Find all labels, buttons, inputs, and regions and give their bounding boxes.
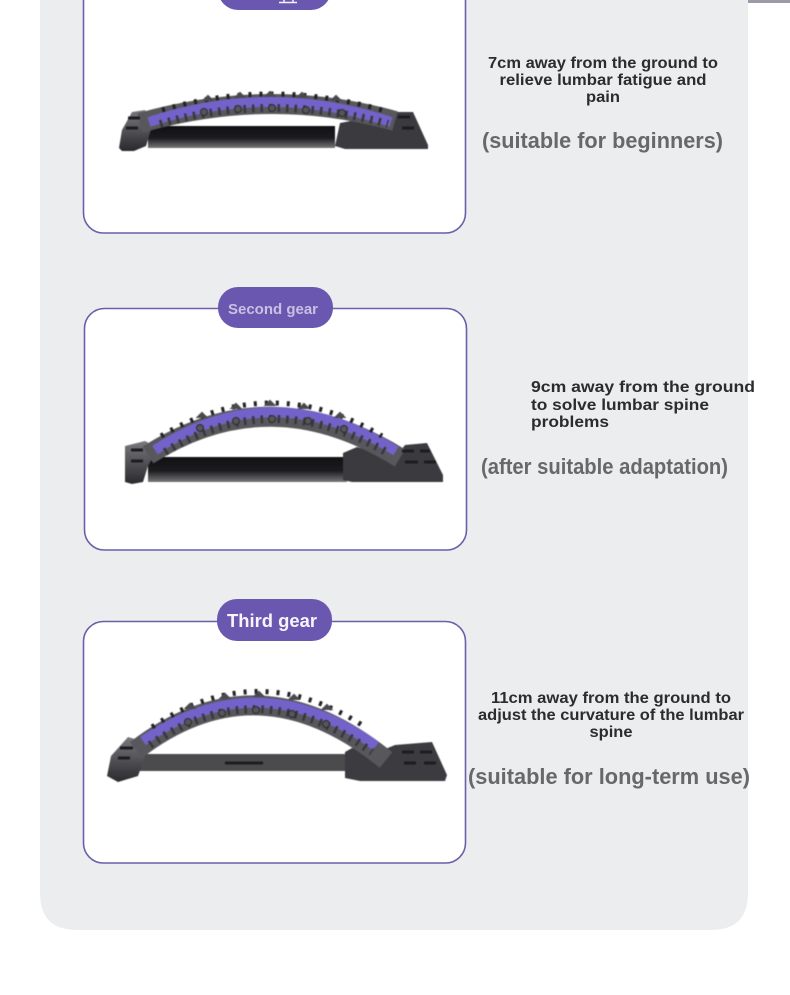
text: second gear description: to solve lumbar spine xyxy=(531,397,709,414)
text: third gear description: adjust the curvature of the lumbar xyxy=(478,707,744,724)
top-right edge strip xyxy=(748,0,790,3)
panel: first gear xyxy=(84,0,466,233)
badge: third gear: Third gear xyxy=(227,611,317,631)
text: third gear description: 11cm away from the ground to xyxy=(491,690,731,707)
product: stretcher at high arch xyxy=(107,692,447,782)
card frame: second gear xyxy=(84,308,466,550)
text: first gear description: (suitable for beginners) xyxy=(482,128,723,153)
text: third gear description: spine xyxy=(590,724,633,741)
badge: second gear xyxy=(218,287,333,328)
text: second gear description: (after suitable adaptation) xyxy=(481,454,728,479)
text: second gear description: 9cm away from the ground xyxy=(531,379,755,396)
card frame: first gear xyxy=(84,0,466,233)
text: third gear description: (suitable for long-term use) xyxy=(468,764,750,789)
text: first gear description: relieve lumbar fatigue and xyxy=(500,72,706,89)
product: stretcher at low arch xyxy=(119,92,428,151)
badge: first gear xyxy=(218,0,331,10)
panel: second gear xyxy=(84,287,466,550)
text: second gear description: problems xyxy=(531,414,609,431)
text: third gear description xyxy=(468,690,750,789)
badge: third gear xyxy=(217,599,332,641)
badge: second gear: Second gear xyxy=(228,301,318,318)
text: first gear description: 7cm away from the ground to xyxy=(488,55,718,72)
product: stretcher at medium arch xyxy=(125,401,443,484)
text: first gear description xyxy=(482,55,723,153)
text: second gear description xyxy=(481,379,755,479)
panel: third gear xyxy=(84,599,466,863)
card frame: third gear xyxy=(84,622,466,863)
text: first gear description: pain xyxy=(586,89,620,106)
